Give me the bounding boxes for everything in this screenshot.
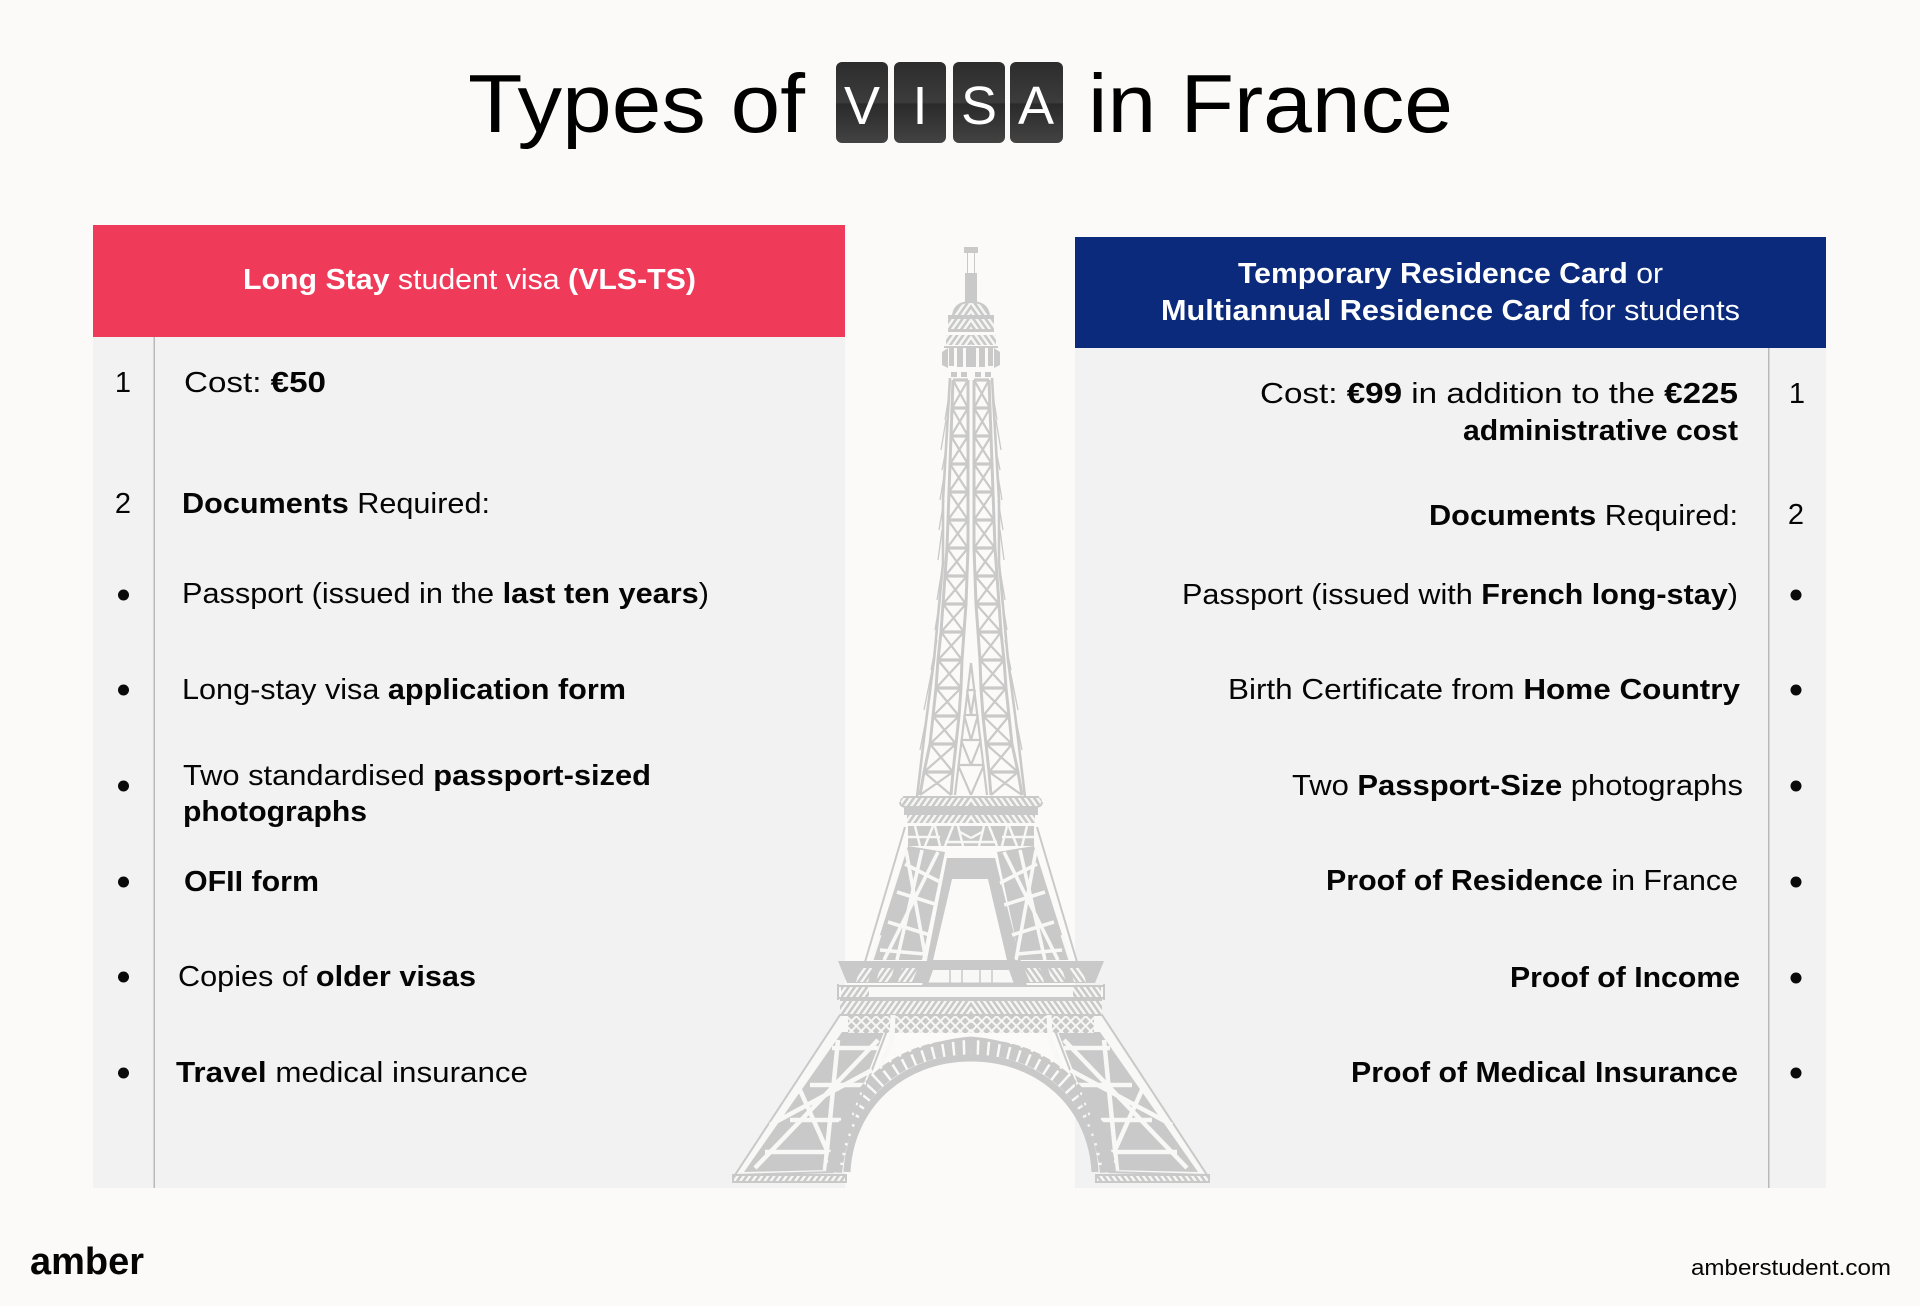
illustration: Eiffel Tower sketch (733, 247, 1209, 1182)
icon: VISA letter tiles: A (1018, 76, 1054, 136)
row: photographs (118, 760, 651, 828)
row: cost: Cost: €99 in addition to the €225 (1260, 378, 1738, 410)
row: cost: Cost: €50 (184, 367, 326, 399)
title (468, 57, 1453, 150)
row: proof of residence: Proof of Residence in France (1326, 865, 1738, 897)
left panel heading (93, 225, 845, 337)
row: proof of income: Proof of Income (1510, 962, 1740, 994)
icon: VISA letter tiles: I (912, 76, 928, 136)
row: photographs: photographs (183, 796, 367, 828)
right panel heading: Temporary Residence Card or (1238, 258, 1663, 290)
left panel body (93, 337, 845, 1188)
right panel heading (1075, 237, 1826, 348)
title: in France (1088, 57, 1453, 150)
logo: amber: amber (30, 1241, 144, 1283)
right panel heading: Multiannual Residence Card for students (1161, 295, 1740, 327)
row: cost: 1 (1789, 378, 1805, 410)
left panel divider (154, 337, 155, 1188)
website url: amberstudent.com (1691, 1255, 1891, 1280)
panel: long stay student visa (93, 225, 845, 1188)
row: photographs: Two Passport-Size photographs (1292, 770, 1743, 802)
row: OFII form (118, 866, 319, 898)
row: documents required: 2 (115, 488, 131, 520)
row: cost (1260, 378, 1805, 447)
row: passport: Passport (issued with French long-stay ) (1182, 579, 1738, 611)
icon: VISA letter tiles: S (961, 76, 997, 136)
panel: residence card for students (1075, 237, 1826, 1188)
row: documents required: Documents Required: (182, 488, 490, 520)
row: cost: 1 (115, 367, 131, 399)
right panel body (1075, 348, 1826, 1188)
icon: VISA letter tiles: V (844, 76, 880, 136)
row: proof of medical insurance: Proof of Medical Insurance (1351, 1057, 1738, 1089)
icon: VISA letter tiles (836, 62, 1063, 143)
row: travel insurance: Travel medical insurance (176, 1057, 528, 1089)
row: documents required: Documents Required: (1429, 500, 1738, 532)
row: older visas: Copies of older visas (178, 961, 476, 993)
title: Types of (468, 57, 806, 150)
left panel heading: Long Stay student visa (VLS-TS) (243, 264, 696, 296)
right list (1182, 378, 1805, 1089)
row: cost (115, 367, 326, 399)
right panel divider (1768, 348, 1770, 1188)
left list (115, 367, 709, 1089)
row: passport: Passport (issued in the last ten years ) (182, 578, 709, 610)
row: application form: Long-stay visa application form (182, 674, 626, 706)
row: photographs: Two standardised passport-sized (183, 760, 651, 792)
row: documents required: 2 (1788, 499, 1804, 531)
row: cost: administrative cost (1463, 415, 1738, 447)
row: birth certificate: Birth Certificate from Home Country (1228, 674, 1740, 706)
row: OFII form: OFII form (184, 866, 319, 898)
